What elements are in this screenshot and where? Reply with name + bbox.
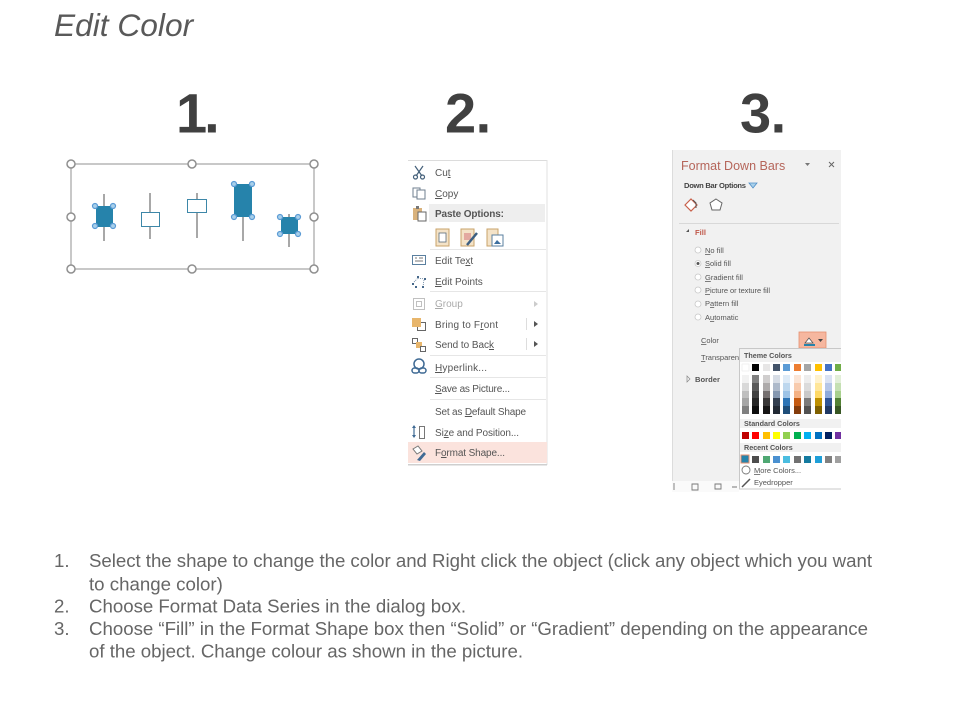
icon: edit text bbox=[412, 256, 426, 264]
menu labels: Paste Options: bbox=[435, 209, 504, 220]
step number 3: 3. bbox=[740, 82, 786, 144]
fill section heading bbox=[686, 228, 706, 237]
icon: edit points bbox=[412, 276, 426, 288]
menu labels: Edit Text bbox=[435, 256, 473, 267]
border section: Border bbox=[695, 375, 720, 384]
icon: bring to front bbox=[412, 318, 426, 330]
recent color swatches bbox=[741, 455, 841, 463]
icon: copy bbox=[413, 188, 425, 199]
fill section heading: Fill bbox=[695, 228, 706, 237]
candle 3 bbox=[188, 193, 206, 238]
menu labels: Copy bbox=[435, 189, 458, 200]
icon: size and position bbox=[412, 425, 424, 438]
radio options: Gradient fill bbox=[705, 273, 743, 282]
candle 1 bbox=[92, 194, 116, 241]
recent colors label: Recent Colors bbox=[744, 443, 793, 452]
title: Edit Color bbox=[54, 7, 195, 43]
icon: group bbox=[414, 298, 424, 310]
radio options bbox=[695, 246, 770, 322]
candle 5 bbox=[278, 214, 300, 247]
radio options: No fill bbox=[705, 246, 724, 255]
step 1 text: 1. bbox=[54, 550, 70, 571]
step 1 text bbox=[54, 550, 873, 594]
color picker popup bbox=[739, 348, 841, 490]
radio options: Solid fill bbox=[705, 259, 731, 268]
icon: send to back bbox=[412, 338, 426, 352]
color row bbox=[701, 332, 826, 348]
radio options: Picture or texture fill bbox=[705, 286, 770, 295]
candle 4 bbox=[232, 182, 254, 241]
radio options: Pattern fill bbox=[705, 299, 739, 308]
icon: fill bucket bbox=[685, 199, 697, 211]
icon: paste bbox=[413, 206, 426, 221]
menu labels: Edit Points bbox=[435, 277, 483, 288]
theme color tints bbox=[742, 375, 841, 414]
menu labels: Send to Back bbox=[435, 340, 495, 351]
icons: paste option buttons bbox=[436, 229, 503, 246]
icon: pentagon bbox=[710, 199, 722, 210]
step 2 text: Choose Format Data Series in the dialog box. bbox=[89, 596, 466, 616]
step number 2: 2. bbox=[445, 82, 491, 144]
step 1 text: Select the shape to change the color and Right click the object (click any object which you want bbox=[89, 550, 873, 571]
icon: format shape bbox=[413, 446, 426, 461]
color row: Color bbox=[701, 336, 719, 345]
submenu arrows bbox=[526, 301, 538, 350]
menu labels: Format Shape... bbox=[435, 448, 505, 459]
standard colors label: Standard Colors bbox=[744, 419, 800, 428]
menu labels: Size and Position... bbox=[435, 428, 519, 439]
menu labels: Save as Picture... bbox=[435, 384, 510, 395]
options label: Down Bar Options bbox=[684, 181, 746, 190]
step 1 text: to change color) bbox=[89, 574, 223, 594]
menu labels: Set as Default Shape bbox=[435, 407, 526, 418]
step 3 text: of the object. Change colour as shown in the picture. bbox=[89, 640, 523, 662]
eyedropper: Eyedropper bbox=[754, 478, 793, 487]
candle 2 bbox=[142, 193, 160, 239]
transparency label: Transparenc bbox=[701, 353, 743, 362]
status bar bbox=[672, 481, 739, 492]
step 3 text: Choose “Fill” in the Format Shape box then “Solid” or “Gradient” depending on the appearance bbox=[89, 618, 868, 639]
panel: selected candlestick chart bbox=[67, 160, 318, 273]
panel: format down bars pane bbox=[672, 150, 841, 492]
step 3 text: 3. bbox=[54, 618, 70, 639]
icon: cut bbox=[414, 166, 424, 179]
menu labels: Cut bbox=[435, 168, 451, 179]
pane heading: Format Down Bars bbox=[681, 159, 785, 173]
pane controls bbox=[805, 162, 834, 167]
menu labels: Group bbox=[435, 299, 463, 310]
menu labels bbox=[435, 168, 526, 459]
menu labels: Bring to Front bbox=[435, 320, 498, 331]
step number 1: 1. bbox=[176, 82, 217, 144]
theme colors label: Theme Colors bbox=[744, 351, 792, 360]
step 3 text bbox=[54, 618, 868, 662]
selection handles bbox=[67, 160, 318, 273]
icon: hyperlink bbox=[412, 359, 426, 373]
menu labels: Hyperlink... bbox=[435, 363, 487, 374]
more colors: More Colors... bbox=[754, 466, 801, 475]
panel: right-click context menu bbox=[408, 160, 548, 466]
theme color swatches bbox=[742, 364, 841, 371]
instructions list bbox=[54, 550, 873, 662]
step 2 text: 2. bbox=[54, 596, 70, 616]
radio options: Automatic bbox=[705, 313, 739, 322]
standard color swatches bbox=[742, 432, 841, 439]
